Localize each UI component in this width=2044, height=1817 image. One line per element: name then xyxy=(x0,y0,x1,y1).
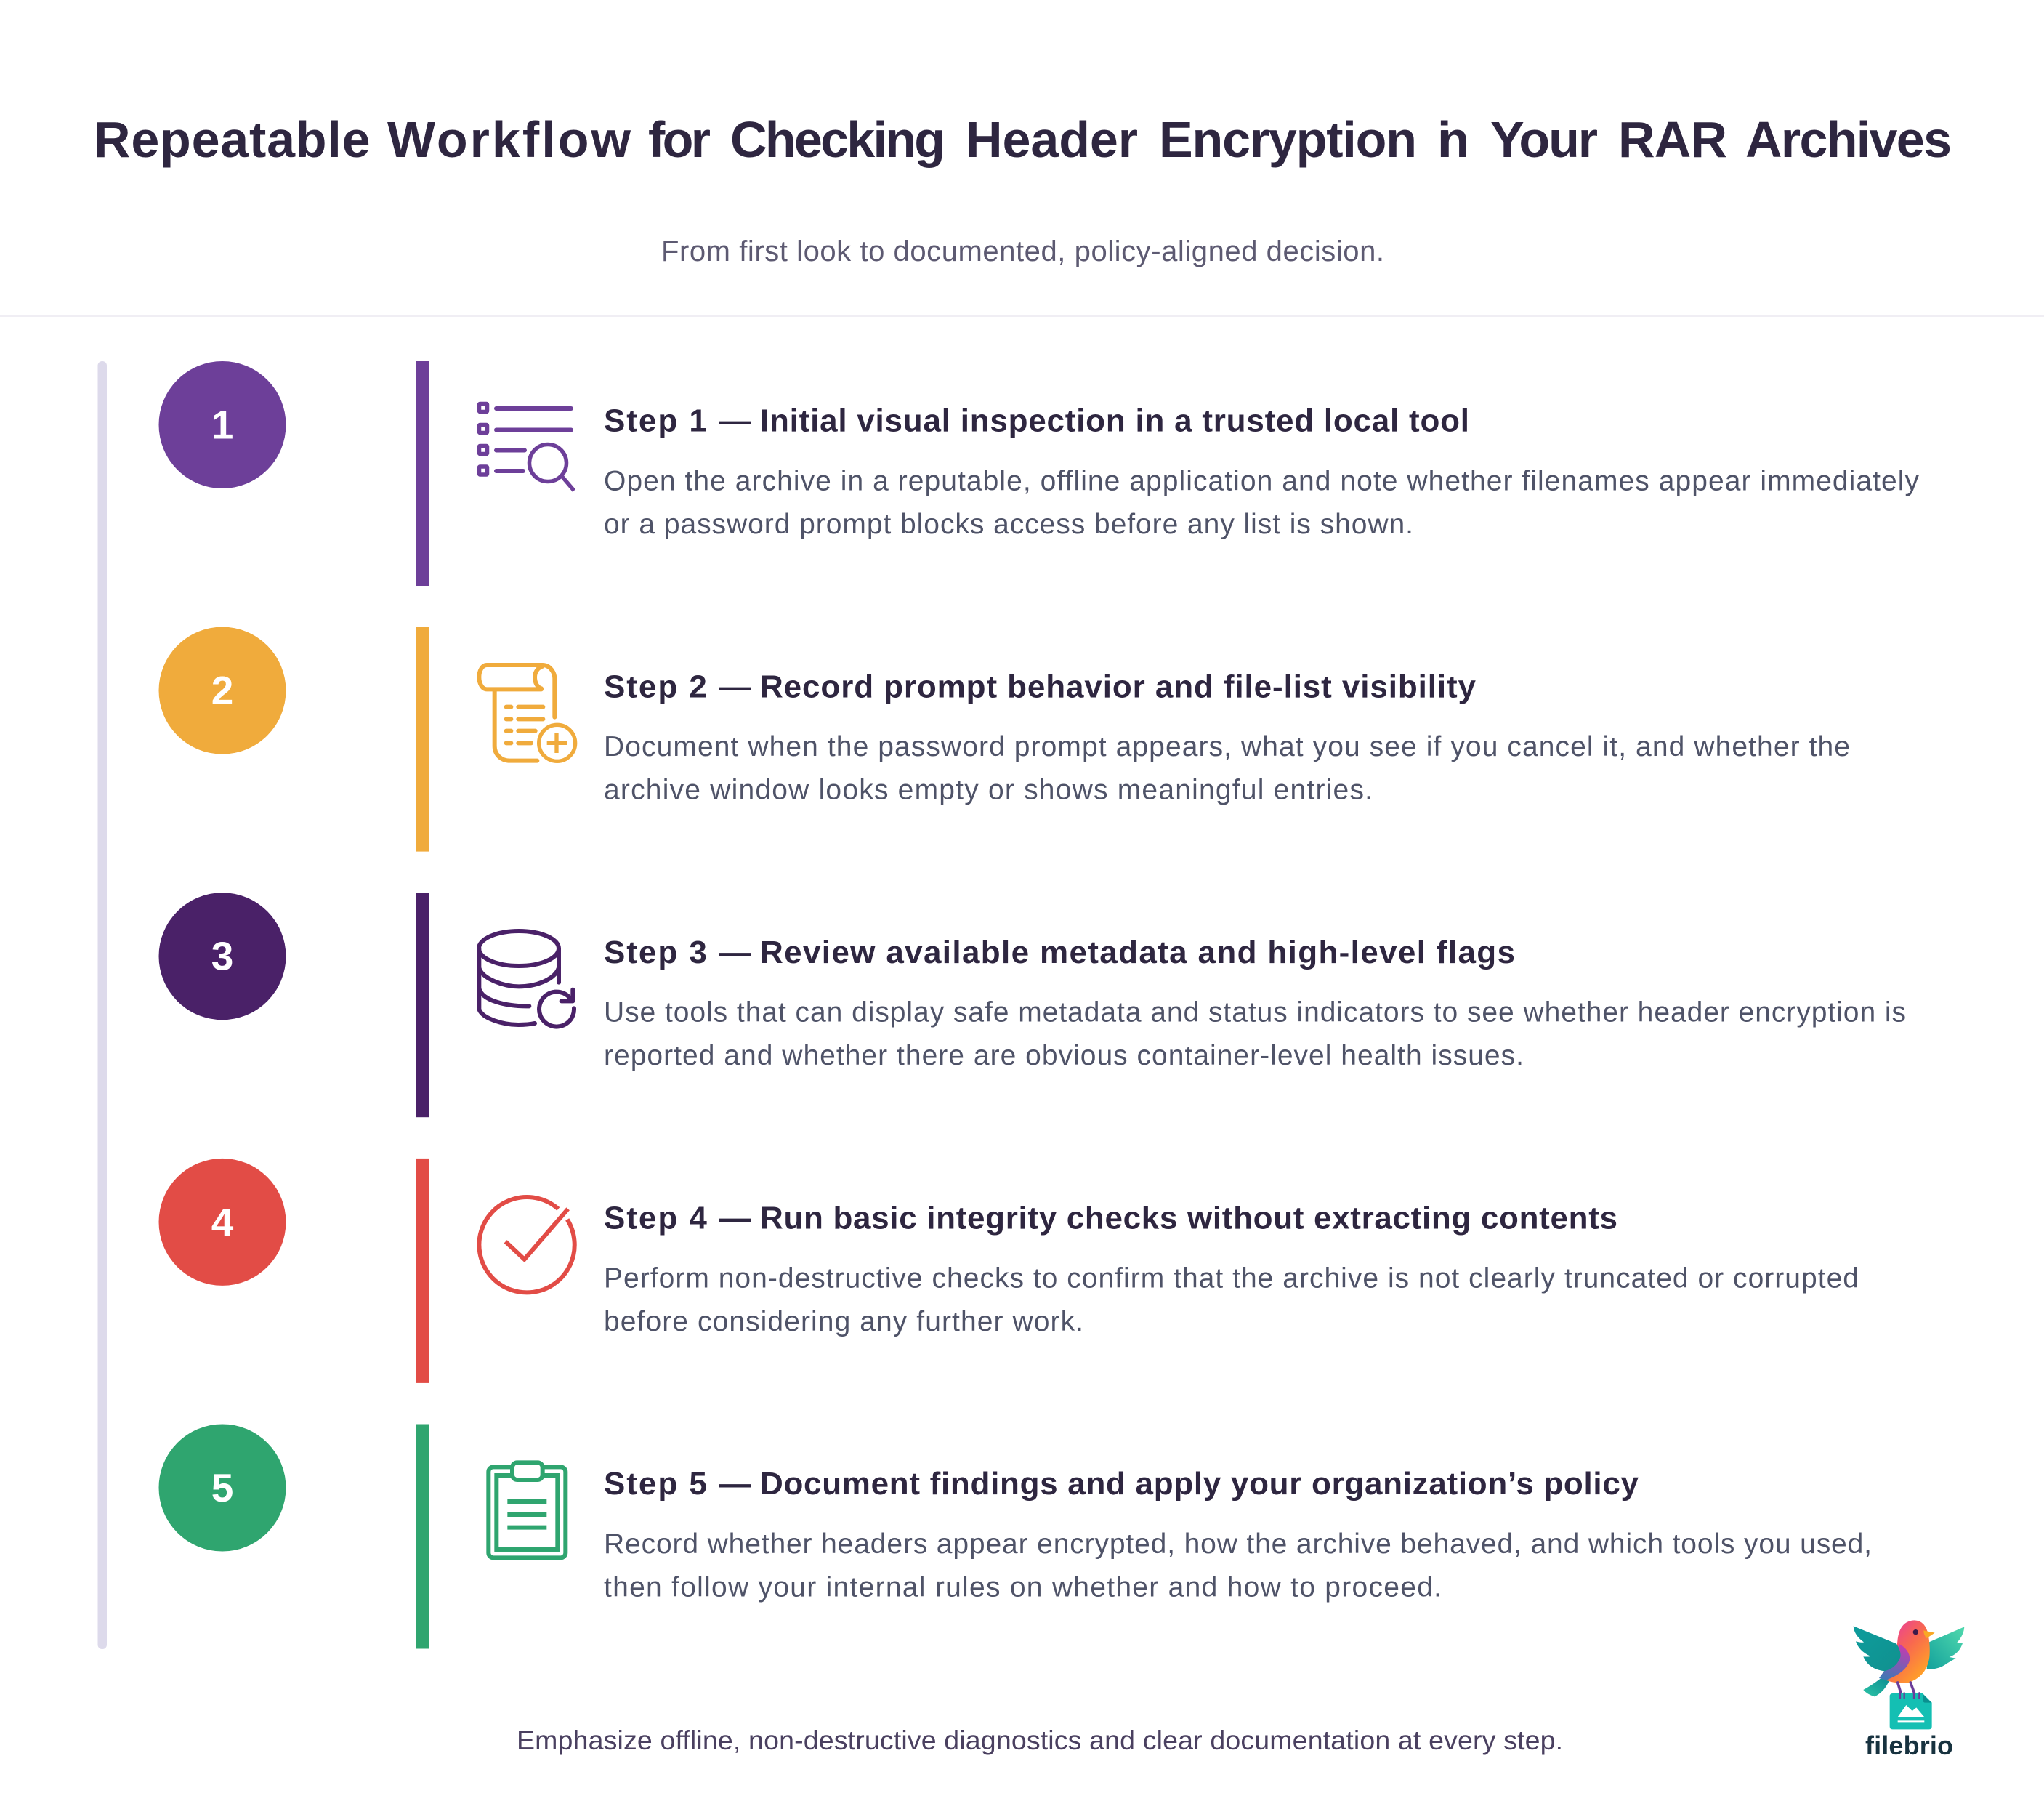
logo: filebrio: filebrio xyxy=(1865,1731,1953,1760)
panel: step 3 xyxy=(158,893,1906,1117)
step 2 description: archive window looks empty or shows meaningful entries. xyxy=(604,775,1373,806)
subtitle: From first look to documented, policy-aligned decision. xyxy=(661,235,1384,267)
step 2 description xyxy=(604,731,1850,806)
title: Archives xyxy=(1745,111,1952,168)
step 5 accent bar xyxy=(416,1425,429,1648)
step 2 number badge xyxy=(158,627,286,754)
icon: circle check xyxy=(479,1197,575,1292)
title: Header xyxy=(966,111,1138,168)
step 4 accent bar xyxy=(416,1159,429,1383)
step 5 description xyxy=(604,1528,1872,1603)
step 1 heading: Step 1 — xyxy=(604,403,751,439)
timeline rail xyxy=(97,361,107,1649)
step 2 description: Document when the password prompt appears, what you see if you cancel it, and whether the xyxy=(604,731,1850,762)
step 2 heading: Record prompt behavior and file-list visibility xyxy=(760,669,1477,704)
step 3 description: Use tools that can display safe metadata and status indicators to see whether header encryption is xyxy=(604,997,1906,1028)
step 3 description: reported and whether there are obvious container-level health issues. xyxy=(604,1040,1524,1071)
step 3 heading: Review available metadata and high-level flags xyxy=(760,935,1515,970)
step 1 accent bar xyxy=(416,361,429,586)
step 5 number badge: 5 xyxy=(211,1465,233,1510)
step 4 description xyxy=(604,1262,1859,1337)
step 5 description: then follow your internal rules on whether and how to proceed. xyxy=(604,1571,1442,1603)
step 5 heading: Document findings and apply your organization’s policy xyxy=(760,1466,1639,1502)
step 4 heading: Step 4 — xyxy=(604,1201,751,1236)
title: Workflow xyxy=(387,111,631,168)
logo: filebrio xyxy=(1854,1620,1964,1760)
step 5 number badge xyxy=(158,1425,286,1551)
icon: checklist with magnifier xyxy=(480,404,574,491)
step 1 number badge: 1 xyxy=(211,403,233,448)
title: Repeatable xyxy=(94,111,371,168)
step 4 heading: Run basic integrity checks without extracting contents xyxy=(760,1201,1617,1236)
title: Checking xyxy=(730,111,945,168)
icon: scroll with plus xyxy=(479,665,575,761)
panel: step 5 xyxy=(158,1425,1872,1648)
step 3 number badge xyxy=(158,893,286,1020)
step 5 description: Record whether headers appear encrypted, how the archive behaved, and which tools you used, xyxy=(604,1528,1872,1560)
step 1 description: Open the archive in a reputable, offline application and note whether filenames appear immediately xyxy=(604,465,1920,497)
footer note: Emphasize offline, non-destructive diagnostics and clear documentation at every step. xyxy=(517,1725,1563,1755)
title: RAR xyxy=(1618,111,1727,168)
panel: step 1 xyxy=(158,361,1920,586)
icon: clipboard xyxy=(488,1462,565,1558)
step 5 heading: Step 5 — xyxy=(604,1466,751,1502)
title: for xyxy=(648,111,711,168)
step 3 accent bar xyxy=(416,893,429,1117)
title: in xyxy=(1437,111,1469,168)
step 3 description xyxy=(604,997,1906,1071)
step 1 description: or a password prompt blocks access before any list is shown. xyxy=(604,509,1413,540)
step 4 description: before considering any further work. xyxy=(604,1306,1083,1337)
title xyxy=(94,111,1952,168)
step 1 heading: Initial visual inspection in a trusted local tool xyxy=(760,403,1469,439)
step 2 number badge: 2 xyxy=(211,668,233,713)
step 1 number badge xyxy=(158,361,286,488)
title: Your xyxy=(1490,111,1598,168)
step 1 description xyxy=(604,465,1920,540)
title: Encryption xyxy=(1159,111,1417,168)
icon: database with refresh xyxy=(479,931,574,1027)
panel: step 2 xyxy=(158,627,1850,852)
panel: step 4 xyxy=(158,1159,1859,1383)
step 3 heading: Step 3 — xyxy=(604,935,751,970)
step 3 number badge: 3 xyxy=(211,934,233,979)
step 4 number badge: 4 xyxy=(211,1199,234,1244)
step 4 number badge xyxy=(158,1159,286,1286)
step 2 accent bar xyxy=(416,627,429,852)
step 2 heading: Step 2 — xyxy=(604,669,751,704)
step 4 description: Perform non-destructive checks to confirm that the archive is not clearly truncated or corrupted xyxy=(604,1262,1859,1294)
